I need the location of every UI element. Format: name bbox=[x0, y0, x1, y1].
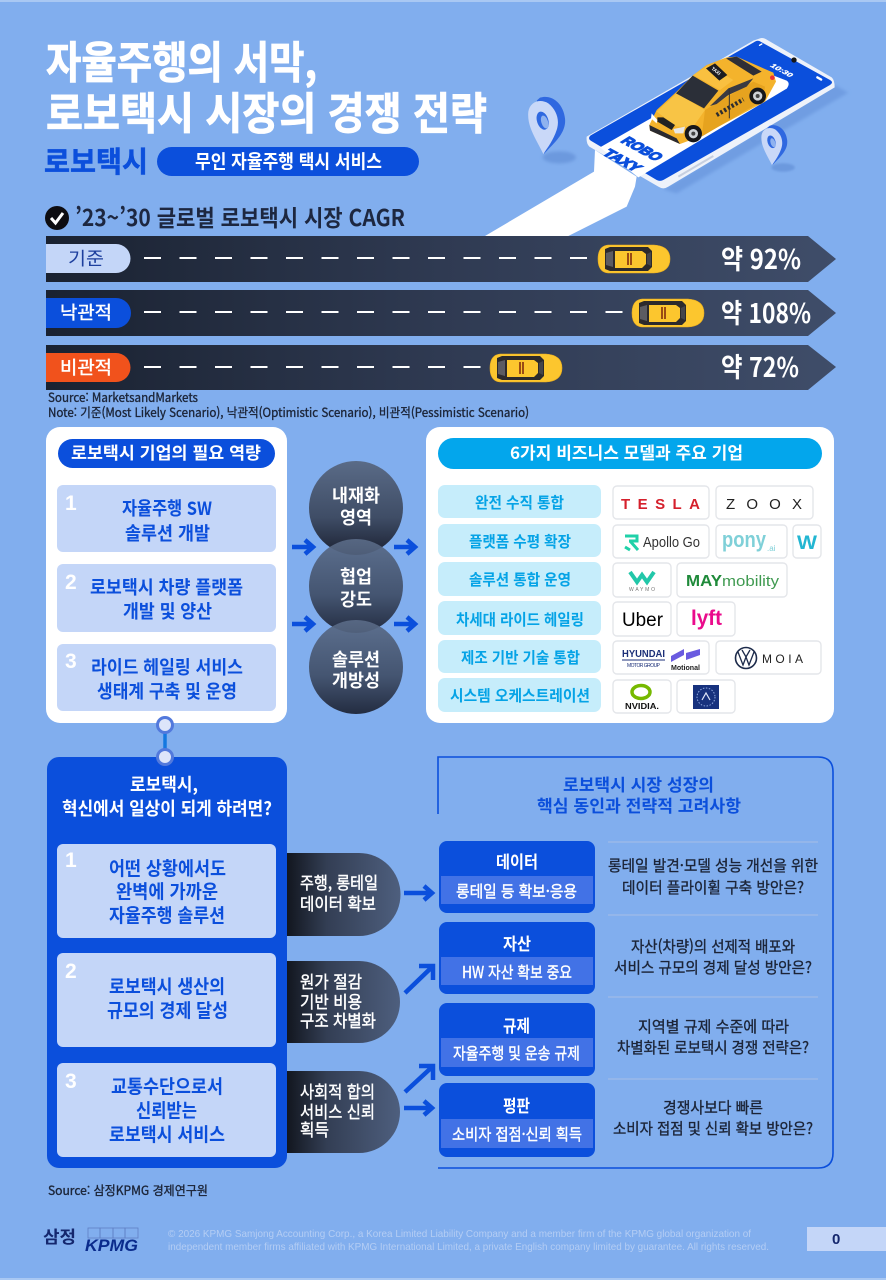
capability 2: 로보택시 차량 플랫폼 bbox=[90, 574, 243, 600]
business model labels: 차세대 라이드 헤일링 bbox=[456, 608, 584, 630]
copyright: independent member firms affiliated with KPMG International Limited, a private English company limited by guarantee. All rights reserved. bbox=[168, 1241, 769, 1253]
logo: Tesla: TESLA bbox=[621, 496, 700, 513]
logo: Samjong KPMG bbox=[43, 1223, 138, 1255]
heading: capabilities: 로보택시 기업의 필요 역량 bbox=[71, 439, 261, 464]
subtitle: robotaxi definition: 무인 자율주행 택시 서비스 bbox=[195, 147, 382, 174]
illustration: robotaxi on smartphone bbox=[485, 38, 848, 236]
callout: cost structure bbox=[287, 961, 400, 1043]
logo: May Mobility: MAY bbox=[686, 573, 722, 590]
logo: Hyundai Motor Group: HYUNDAI bbox=[622, 649, 665, 660]
driver: reputation bbox=[439, 1083, 813, 1157]
logo: Motional: Motional bbox=[671, 665, 700, 672]
title bbox=[46, 27, 487, 142]
logo boxes bbox=[613, 486, 821, 713]
icon: check mark bbox=[45, 206, 69, 230]
bar: base scenario bbox=[46, 236, 836, 282]
logo: Nvidia bbox=[625, 686, 659, 711]
callout: cost structure: 구조 차별화 bbox=[300, 1007, 376, 1032]
icon: small location pin bbox=[761, 125, 795, 172]
driver: reputation: 경쟁사보다 빠른 bbox=[663, 1096, 763, 1118]
requirement 2: 규모의 경제 달성 bbox=[107, 996, 228, 1023]
ROBO TAXY label: ROBO bbox=[617, 135, 666, 163]
driver: regulation: 자율주행 및 운송 규제 bbox=[453, 1040, 580, 1064]
logo: Volkswagen MOIA bbox=[736, 648, 803, 668]
overlapping axis circles: 내재화 bbox=[332, 482, 380, 508]
business model labels: 플랫폼 수평 확장 bbox=[469, 530, 571, 552]
capability 2 bbox=[57, 564, 276, 632]
callout: social consensus: 획득 bbox=[300, 1116, 329, 1141]
callout: driving data: 데이터 확보 bbox=[300, 890, 376, 915]
ROBO TAXY label bbox=[598, 135, 666, 174]
requirement 3: 3 bbox=[65, 1070, 77, 1093]
logo: Hyundai Motor Group: MOTOR GROUP bbox=[627, 663, 661, 669]
bar: base scenario: 기준 bbox=[68, 245, 104, 271]
driver: assets: 서비스 규모의 경제 달성 방안은? bbox=[614, 956, 812, 978]
requirement 3: 로보택시 서비스 bbox=[109, 1120, 225, 1147]
logo: Samjong KPMG: 삼정 bbox=[43, 1223, 76, 1248]
source note: Source: MarketsandMarkets bbox=[48, 387, 198, 406]
overlapping axis circles: 솔루션 bbox=[332, 646, 380, 672]
logo: Volkswagen MOIA: MOIA bbox=[762, 652, 803, 666]
title: 자율주행의 서막, bbox=[46, 27, 317, 91]
logo: navy square bbox=[693, 685, 719, 709]
heading: business models: 6가지 비즈니스 모델과 주요 기업 bbox=[510, 439, 743, 464]
logo: Zoox: ZOOX bbox=[726, 496, 802, 513]
logo: Pony.ai: .ai bbox=[767, 544, 776, 553]
copyright bbox=[168, 1228, 769, 1253]
logo: Apollo Go bbox=[625, 534, 700, 551]
bar: optimistic scenario: 낙관적 bbox=[60, 299, 112, 325]
business model labels: 제조 기반 기술 통합 bbox=[461, 646, 580, 668]
capability 3 bbox=[57, 644, 276, 711]
capability 3: 라이드 헤일링 서비스 bbox=[91, 654, 243, 680]
logo: Lyft: lyft bbox=[691, 607, 722, 630]
overlapping axis circles: 개방성 bbox=[332, 667, 380, 693]
logo: Nvidia: NVIDIA. bbox=[625, 701, 659, 711]
requirement 2: 로보택시 생산의 bbox=[109, 972, 225, 999]
callout: cost structure: 원가 절감 bbox=[300, 968, 362, 993]
heading: business models bbox=[438, 438, 822, 469]
business model labels bbox=[438, 485, 601, 712]
driver: regulation: 지역별 규제 수준에 따라 bbox=[638, 1015, 789, 1037]
logo: Waymo: WAYMO bbox=[629, 587, 655, 593]
logo: May Mobility: mobility bbox=[722, 573, 780, 590]
requirement 1: 1 bbox=[65, 849, 77, 872]
callout: social consensus bbox=[287, 1071, 400, 1153]
copyright: © 2026 KPMG Samjong Accounting Corp., a Korea Limited Liability Company and a member firm of the KPMG global organization of bbox=[168, 1228, 751, 1240]
capability 1: 솔루션 개발 bbox=[125, 520, 210, 546]
smartphone: 10:30 bbox=[768, 63, 796, 79]
panel: business models bbox=[426, 427, 834, 723]
overlapping axis circles: 강도 bbox=[340, 586, 372, 612]
icon: yellow taxi bbox=[649, 57, 776, 144]
source note bbox=[48, 387, 529, 421]
logo: Uber: Uber bbox=[622, 610, 664, 631]
requirement 3: 신뢰받는 bbox=[136, 1096, 197, 1123]
callout: driving data: 주행, 롱테일 bbox=[300, 869, 378, 894]
requirement 2 bbox=[57, 953, 276, 1047]
driver: data: 롱테일 등 확보·응용 bbox=[456, 878, 577, 902]
business model labels: 완전 수직 통합 bbox=[475, 491, 564, 513]
business model labels: 솔루션 통합 운영 bbox=[469, 568, 571, 590]
driver: data: 롱테일 발견·모델 성능 개선을 위한 bbox=[608, 854, 818, 876]
overlapping axis circles: 영역 bbox=[340, 504, 372, 530]
bar: pessimistic scenario: 약 72% bbox=[721, 346, 799, 385]
driver: data: 데이터 bbox=[496, 848, 538, 873]
panel: required capabilities bbox=[46, 427, 287, 723]
driver: data: 데이터 플라이휠 구축 방안은? bbox=[622, 876, 804, 898]
icon: large location pin bbox=[528, 97, 576, 163]
driver: assets: HW 자산 확보 중요 bbox=[462, 959, 572, 983]
logo: Waymo bbox=[629, 572, 655, 593]
capability 3: 3 bbox=[65, 650, 77, 673]
callout: cost structure: 기반 비용 bbox=[300, 988, 362, 1013]
callout: social consensus: 서비스 신뢰 bbox=[300, 1098, 375, 1123]
driver: reputation: 평판 bbox=[503, 1092, 530, 1117]
capability 3: 생태계 구축 및 운영 bbox=[97, 678, 237, 704]
icon: yellow taxi: TAXI bbox=[710, 66, 722, 77]
subtitle: robotaxi definition: 로보택시 bbox=[44, 139, 148, 181]
requirement 3 bbox=[57, 1063, 276, 1157]
driver: reputation: 소비자 접점·신뢰 획득 bbox=[452, 1121, 582, 1145]
driver: reputation: 소비자 접점 및 신뢰 확보 방안은? bbox=[613, 1117, 813, 1139]
driver: regulation: 차별화된 로보택시 경쟁 전략은? bbox=[617, 1036, 809, 1058]
driver: assets bbox=[439, 922, 812, 994]
road bbox=[485, 150, 637, 236]
logo: Hyundai Motor Group bbox=[622, 649, 665, 669]
capability 2: 개발 및 양산 bbox=[123, 598, 212, 624]
driver: regulation bbox=[439, 1003, 809, 1076]
capability 1 bbox=[57, 485, 276, 552]
logo: May Mobility bbox=[686, 573, 780, 590]
panel heading: 핵심 동인과 전략적 고려사항 bbox=[537, 792, 741, 817]
capability 1: 1 bbox=[65, 492, 77, 515]
source note: Note: 기준(Most Likely Scenario), 낙관적(Optimistic Scenario), 비관적(Pessimistic Scenario) bbox=[48, 402, 529, 421]
driver: regulation: 규제 bbox=[503, 1012, 530, 1037]
panel heading bbox=[537, 771, 741, 817]
driver: assets: 자산(차량)의 선제적 배포와 bbox=[631, 935, 795, 957]
driver: assets: 자산 bbox=[503, 930, 531, 955]
bar: optimistic scenario bbox=[46, 290, 836, 336]
bar: optimistic scenario: 약 108% bbox=[721, 292, 811, 331]
bar: pessimistic scenario: 비관적 bbox=[60, 354, 112, 380]
requirement 2: 2 bbox=[65, 960, 77, 983]
panel: growth drivers outline bbox=[438, 757, 833, 1168]
requirement 1: 어떤 상황에서도 bbox=[109, 854, 226, 881]
CAGR heading: ’23~’30 글로벌 로보택시 시장 CAGR bbox=[75, 199, 405, 233]
panel heading bbox=[62, 771, 272, 821]
callout: social consensus: 사회적 합의 bbox=[300, 1078, 375, 1103]
arrows to growth drivers bbox=[404, 886, 433, 1115]
page number: 0 bbox=[832, 1231, 840, 1248]
capability 1: 자율주행 SW bbox=[122, 495, 212, 521]
logo: Motional bbox=[671, 649, 700, 672]
title: 로보택시 시장의 경쟁 전략 bbox=[46, 78, 487, 142]
ROBO TAXY label: TAXY bbox=[598, 148, 645, 174]
arrows between panels bbox=[292, 540, 415, 631]
capability 2: 2 bbox=[65, 571, 77, 594]
requirement 1: 자율주행 솔루션 bbox=[109, 901, 225, 928]
logo: Apollo Go: Apollo Go bbox=[643, 534, 700, 551]
callout: driving data bbox=[287, 853, 400, 936]
business model labels: 시스템 오케스트레이션 bbox=[450, 684, 590, 706]
smartphone bbox=[587, 38, 848, 193]
page number bbox=[807, 1227, 886, 1251]
requirement 1: 완벽에 가까운 bbox=[116, 877, 218, 904]
logo: Samjong KPMG: KPMG bbox=[85, 1236, 138, 1255]
source: Source: 삼정KPMG 경제연구원 bbox=[48, 1180, 208, 1199]
logo: WeRide: W bbox=[797, 533, 817, 554]
driver: data bbox=[439, 841, 818, 913]
panel heading: 로보택시 시장 성장의 bbox=[563, 771, 714, 796]
bar: pessimistic scenario bbox=[46, 345, 836, 390]
panel heading: 혁신에서 일상이 되게 하려면? bbox=[62, 795, 272, 821]
logo: Pony.ai: pony bbox=[722, 527, 767, 552]
panel: how to make robotaxi everyday bbox=[47, 750, 287, 1168]
connector between panels bbox=[158, 718, 172, 757]
requirement 3: 교통수단으로서 bbox=[111, 1072, 223, 1099]
overlapping axis circles: 협업 bbox=[340, 563, 372, 589]
panel heading: 로보택시, bbox=[130, 771, 198, 797]
bar: base scenario: 약 92% bbox=[721, 238, 801, 277]
requirement 1 bbox=[57, 844, 276, 938]
subtitle: robotaxi definition bbox=[44, 139, 419, 181]
overlapping axis circles bbox=[309, 461, 403, 714]
